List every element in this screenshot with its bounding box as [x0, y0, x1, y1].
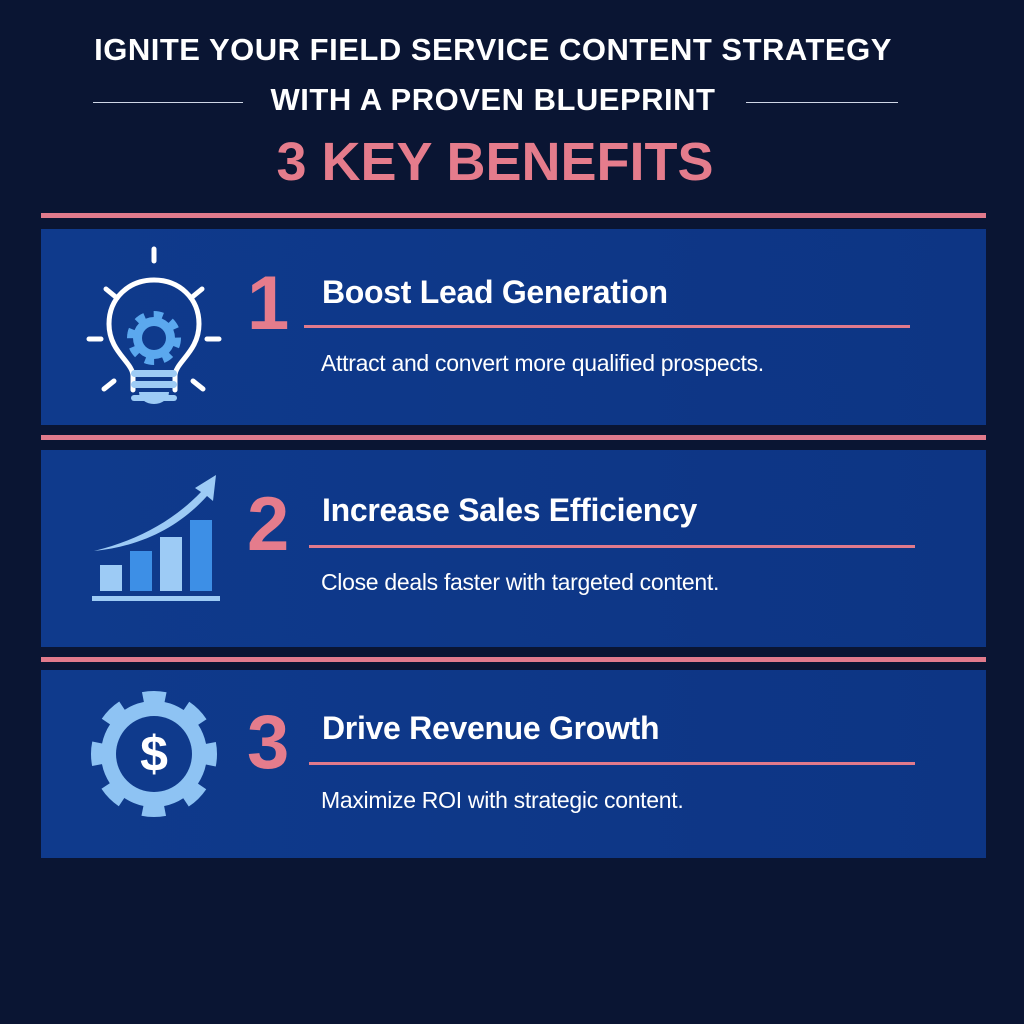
title: IGNITE YOUR FIELD SERVICE CONTENT STRATEGY — [94, 32, 892, 67]
heading: Increase Sales Efficiency — [322, 492, 697, 528]
number 2: 2 — [247, 482, 289, 567]
heading: Drive Revenue Growth — [322, 710, 659, 746]
description: Maximize ROI with strategic content. — [321, 787, 683, 813]
description: Close deals faster with targeted content. — [321, 569, 719, 595]
icon: gear with dollar: $ — [140, 726, 168, 782]
icon: gear with dollar — [91, 691, 217, 817]
panel: drive revenue growth — [41, 670, 986, 858]
panel: boost lead generation — [41, 229, 986, 425]
number 3: 3 — [247, 700, 289, 785]
number 1: 1 — [247, 261, 289, 346]
panel: increase sales efficiency — [41, 450, 986, 647]
icon: lightbulb with gear — [86, 246, 222, 401]
subtitle: WITH A PROVEN BLUEPRINT — [271, 82, 715, 117]
icon: bar chart with arrow — [92, 475, 220, 601]
heading: Boost Lead Generation — [322, 274, 668, 310]
heading: 3 key benefits: 3 KEY BENEFITS — [276, 132, 714, 192]
description: Attract and convert more qualified prospects. — [321, 350, 764, 376]
